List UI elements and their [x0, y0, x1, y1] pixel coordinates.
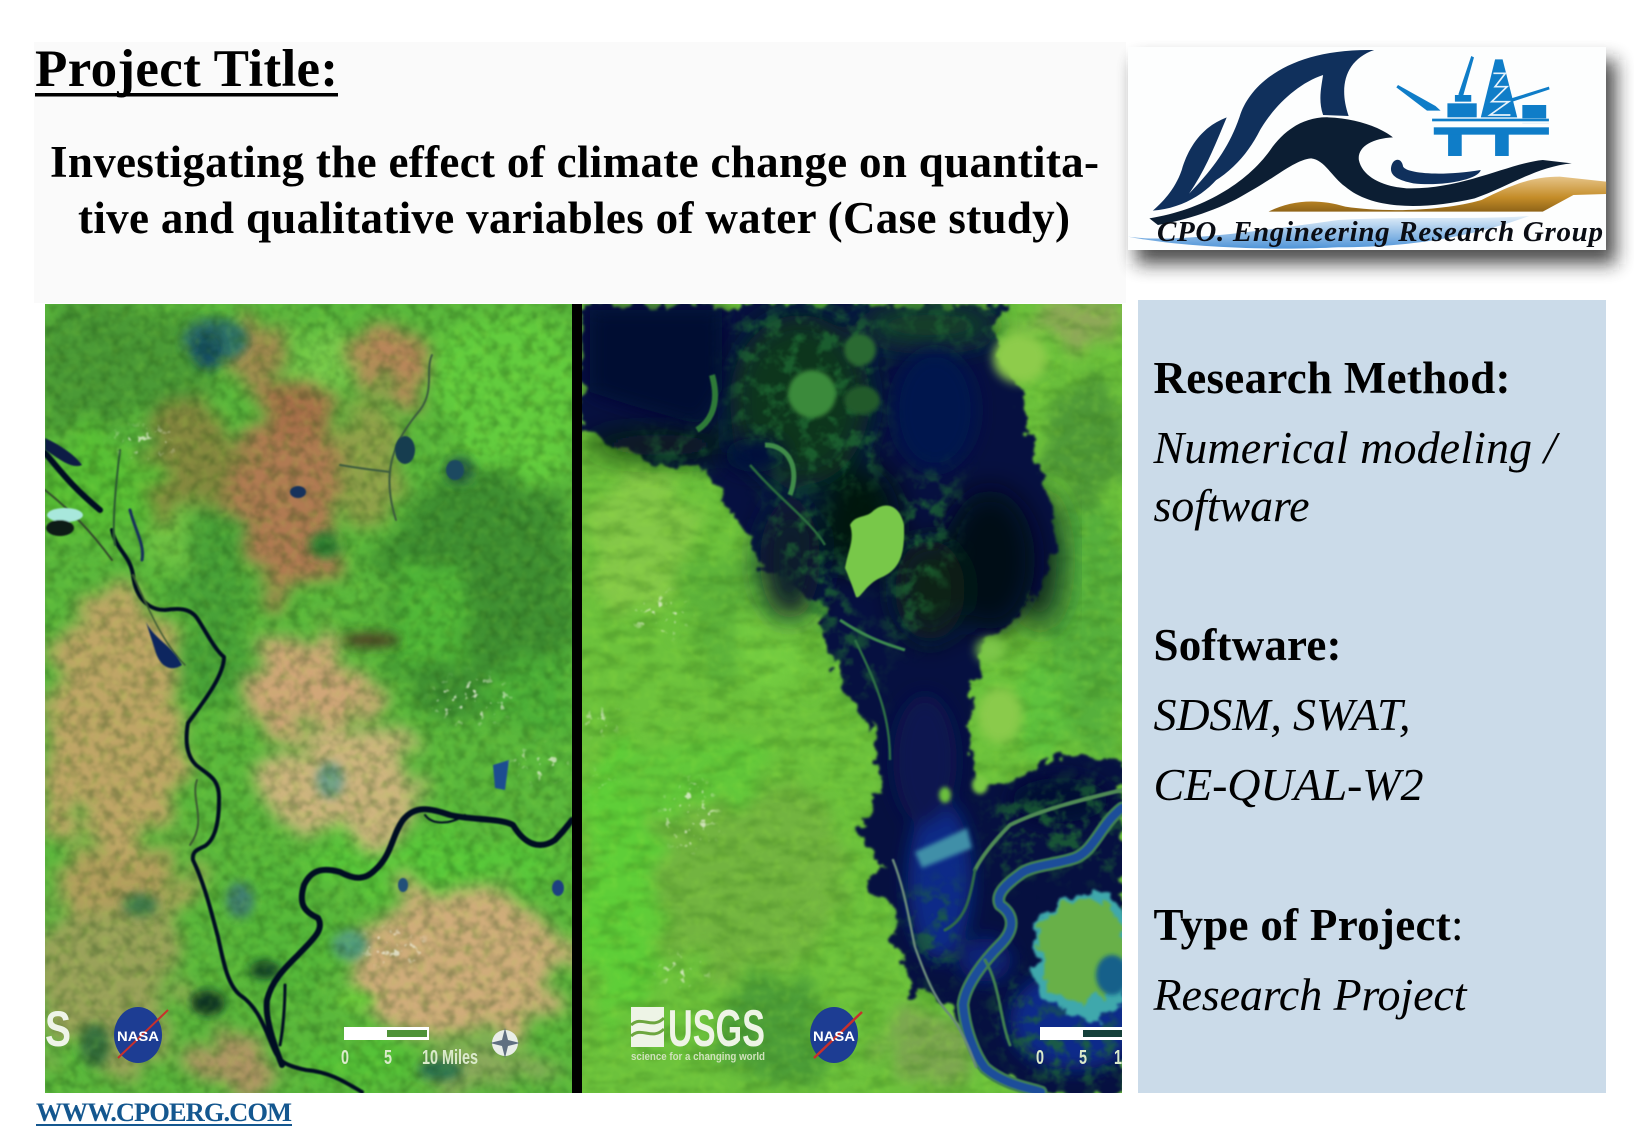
clouds: [113, 430, 566, 963]
flooded land lower right: [915, 828, 1137, 1019]
USGS logo: USGS: [668, 1000, 765, 1058]
type of project: Research Project: [1152, 969, 1468, 1020]
logo: crest wave: [1189, 50, 1374, 193]
rivers and lakes: [45, 355, 572, 1092]
NASA badge: [114, 1007, 168, 1063]
scale bar: 5: [384, 1047, 392, 1069]
sharper land features: [80, 318, 474, 1080]
website link: WWW.CPOERG.COM: [36, 1097, 292, 1127]
land cover colour areas: [40, 304, 580, 1093]
green land colour areas: [585, 300, 1135, 1090]
USGS logo: science for a changing world: [631, 1051, 765, 1063]
type of project: [1152, 900, 1468, 1020]
dark marsh vegetation: [585, 305, 1035, 640]
logo: sand dunes: [1269, 177, 1606, 212]
marsh vegetation veins: [640, 310, 1122, 1090]
research method: software: [1154, 480, 1310, 531]
research method: Numerical modeling /: [1152, 422, 1561, 473]
project title text: Investigating the effect of climate change on quantita-: [50, 137, 1099, 187]
software: Software:: [1154, 620, 1342, 670]
land texture: [45, 304, 572, 1093]
green marsh blobs: [788, 334, 988, 803]
project title text: tive and qualitative variables of water (Case study): [78, 193, 1070, 243]
title background panel: [34, 42, 1126, 303]
logo: CPO Engineering Research Group: [1128, 47, 1606, 250]
logo: water swoosh: [1128, 216, 1529, 249]
compass rose: [490, 1028, 520, 1058]
type of project: Type of Project:: [1154, 900, 1464, 950]
logo: main dark wave: [1149, 117, 1572, 225]
lakes: [45, 436, 564, 896]
soft dark shore on right of water: [1014, 490, 1066, 630]
scale bar: [1036, 1027, 1122, 1069]
logo shadow: [1136, 60, 1616, 264]
software: CE-QUAL-W2: [1154, 759, 1424, 810]
upper right light green crater: [976, 333, 1047, 743]
panel: project details: [1138, 300, 1606, 1093]
logo: small hook wave: [1391, 160, 1481, 184]
land texture: [582, 304, 1122, 1093]
satellite image: after (right): [582, 300, 1140, 1093]
scale bar: 0: [341, 1047, 349, 1069]
lake vegetation rings: [697, 375, 905, 760]
logo: group name: CPO. Engineering Research Group: [1157, 216, 1603, 248]
NASA badge: NASA: [117, 1028, 159, 1044]
water body: [582, 304, 1122, 1093]
satellite image: before (left): [40, 304, 580, 1093]
project title text: [50, 137, 1099, 243]
island: [845, 506, 904, 597]
scale bar: [342, 1027, 478, 1064]
divider bar between images: [572, 304, 582, 1093]
USGS logo fragment: S: [45, 1001, 71, 1057]
river channels: [893, 790, 1122, 1092]
logo: left leaf wave: [1153, 117, 1227, 211]
software: SDSM, SWAT,: [1154, 689, 1410, 740]
software: [1154, 620, 1424, 810]
clouds: [582, 595, 716, 984]
scale bar: 0: [1036, 1047, 1044, 1069]
open water areas: [590, 310, 1140, 1070]
USGS logo: [630, 1007, 764, 1062]
research method: Research Method:: [1154, 353, 1510, 403]
scale bar: 10 Miles: [422, 1047, 478, 1069]
heading: project title: Project Title:: [35, 40, 338, 98]
NASA badge: NASA: [813, 1028, 855, 1044]
NASA badge: [810, 1007, 862, 1063]
scale bar: 1: [1114, 1047, 1122, 1069]
scale bar: 5: [1079, 1047, 1087, 1069]
logo: oil rig: [1396, 56, 1550, 156]
research method: [1152, 353, 1561, 531]
